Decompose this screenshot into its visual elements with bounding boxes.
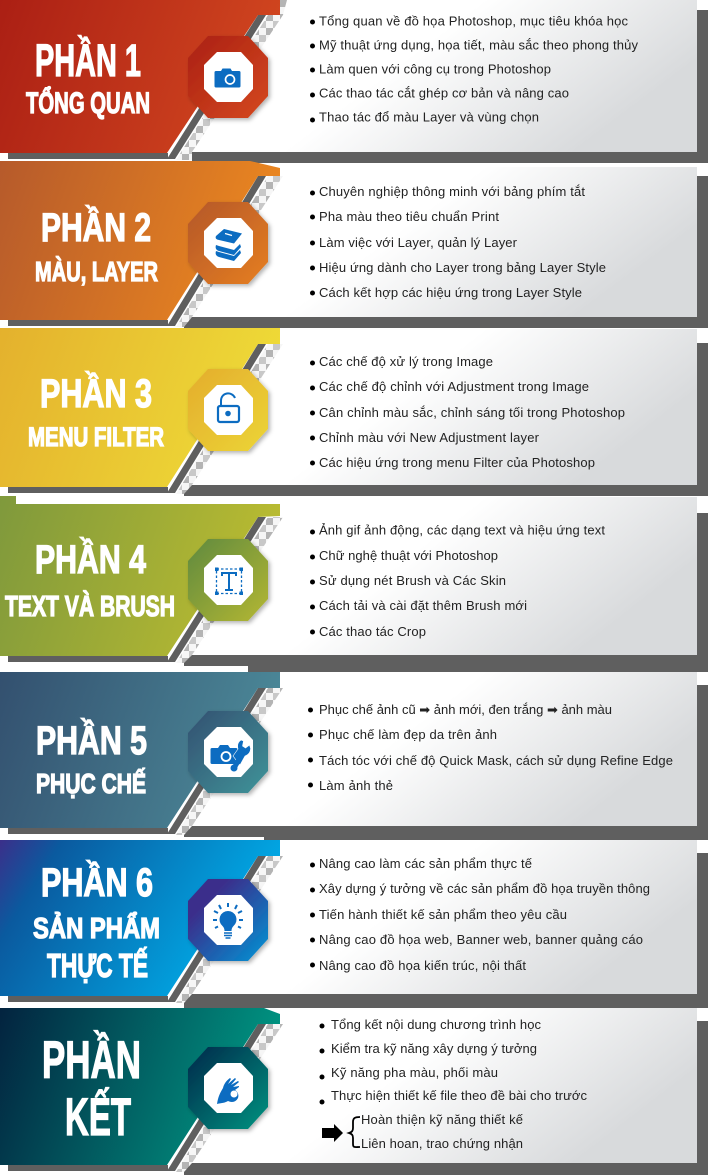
bullet list [310, 856, 650, 973]
bullet list: Các thao tác Crop [319, 624, 426, 639]
heading: PHẦN 1 [35, 35, 141, 86]
bullet list [320, 1017, 588, 1104]
bullet list: Phục chế làm đẹp da trên ảnh [319, 727, 497, 742]
heading: MENU FILTER [28, 422, 164, 452]
heading [28, 370, 164, 452]
brace with outcomes [349, 1112, 524, 1151]
section banner [0, 161, 280, 320]
bullet list: Các thao tác cắt ghép cơ bản và nâng cao [319, 86, 569, 100]
bullet list: Pha màu theo tiêu chuẩn Print [319, 209, 499, 224]
bullet list: Tổng quan về đồ họa Photoshop, mục tiêu khóa học [319, 14, 628, 28]
heading [5, 536, 175, 623]
icon: books badge [188, 202, 268, 284]
bullet list: Nâng cao đồ họa kiến trúc, nội thất [319, 958, 526, 973]
heading: MÀU, LAYER [35, 256, 158, 287]
icon: camera badge [188, 36, 268, 118]
bullet list: Chuyên nghiệp thông minh với bảng phím tắt [319, 184, 585, 199]
section banner [0, 0, 280, 153]
icon: ok hand badge [188, 1047, 268, 1129]
bullet list: Làm việc với Layer, quản lý Layer [319, 235, 518, 250]
heading: PHẦN 6 [41, 859, 153, 905]
panel: phần kết [0, 1008, 708, 1175]
bullet list: Cách kết hợp các hiệu ứng trong Layer Style [319, 285, 582, 300]
heading: PHẦN [42, 1030, 141, 1090]
bullet list [310, 14, 638, 124]
bullet list: Tổng kết nội dung chương trình học [331, 1017, 542, 1032]
bullet list: Nâng cao làm các sản phẩm thực tế [319, 856, 533, 871]
section banner [0, 840, 280, 996]
panel: phần 5 [0, 664, 708, 837]
panel: phần 3 [0, 328, 708, 496]
heading: PHỤC CHẾ [36, 768, 146, 799]
bullet list: Chỉnh màu với New Adjustment layer [319, 430, 540, 445]
heading [36, 717, 147, 799]
bullet list: Các chế độ xử lý trong Image [319, 354, 493, 369]
bullet list: Các hiệu ứng trong menu Filter của Photoshop [319, 455, 595, 470]
section banner [0, 328, 280, 487]
icon: text tool badge [188, 539, 268, 621]
heading [42, 1030, 141, 1147]
bullet list: Kỹ năng pha màu, phối màu [331, 1065, 498, 1080]
panel: phần 2 [0, 161, 708, 328]
bullet list: Phục chế ảnh cũ ➡ ảnh mới, đen trắng ➡ ảnh màu [319, 702, 612, 717]
bullet list: Tách tóc với chế độ Quick Mask, cách sử dụng Refine Edge [319, 753, 673, 768]
bullet list: Ảnh gif ảnh động, các dạng text và hiệu ứng text [319, 522, 605, 538]
heading [26, 35, 150, 120]
section banner [0, 672, 280, 828]
brace with outcomes: Hoàn thiện kỹ năng thiết kế [361, 1112, 524, 1127]
heading: PHẦN 5 [36, 717, 147, 763]
heading: KẾT [65, 1087, 131, 1147]
bullet list: Tiến hành thiết kế sản phẩm theo yêu cầu [319, 907, 567, 922]
brace with outcomes: Liên hoan, trao chứng nhận [361, 1136, 523, 1151]
bullet list [310, 184, 606, 300]
heading: PHẦN 4 [35, 536, 147, 582]
bullet list [310, 354, 625, 470]
bullet list: Nâng cao đồ họa web, Banner web, banner quảng cáo [319, 932, 643, 947]
section banner [0, 496, 280, 656]
bullet list: Cách tải và cài đặt thêm Brush mới [319, 598, 527, 613]
bullet list: Sử dụng nét Brush và Các Skin [319, 573, 506, 588]
heading: TEXT VÀ BRUSH [5, 589, 175, 623]
bullet list: Thực hiện thiết kế file theo đề bài cho trước [331, 1088, 588, 1103]
panel: phần 1 [0, 0, 708, 163]
icon: arrow [322, 1124, 343, 1142]
bullet list [310, 522, 605, 639]
panel: phần 4 [0, 496, 708, 666]
heading: SẢN PHẨM [33, 911, 160, 945]
bullet list: Các chế độ chỉnh với Adjustment trong Image [319, 379, 589, 394]
heading [33, 859, 160, 984]
icon: light bulb badge [188, 879, 268, 961]
bullet list: Xây dựng ý tưởng về các sản phẩm đồ họa truyền thông [319, 881, 650, 896]
bullet list: Thao tác đổ màu Layer và vùng chọn [319, 110, 539, 124]
bullet list: Làm ảnh thẻ [319, 778, 393, 793]
icon: camera and wrench badge [188, 711, 268, 793]
section banner [0, 1008, 280, 1165]
icon: padlock badge [188, 369, 268, 451]
heading: THỰC TẾ [47, 947, 148, 984]
heading [35, 204, 158, 287]
bullet list: Kiểm tra kỹ năng xây dựng ý tưởng [331, 1041, 537, 1056]
bullet list: Làm quen với công cụ trong Photoshop [319, 62, 551, 76]
bullet list: Cân chỉnh màu sắc, chỉnh sáng tối trong Photoshop [319, 405, 625, 420]
heading: PHẦN 2 [41, 204, 151, 250]
bullet list [308, 702, 673, 793]
bullet list: Mỹ thuật ứng dụng, họa tiết, màu sắc theo phong thủy [319, 38, 638, 52]
bullet list: Chữ nghệ thuật với Photoshop [319, 548, 498, 563]
panel: phần 6 [0, 837, 708, 1008]
heading: PHẦN 3 [40, 370, 152, 416]
heading: TỔNG QUAN [26, 86, 150, 120]
bullet list: Hiệu ứng dành cho Layer trong bảng Layer Style [319, 260, 606, 275]
